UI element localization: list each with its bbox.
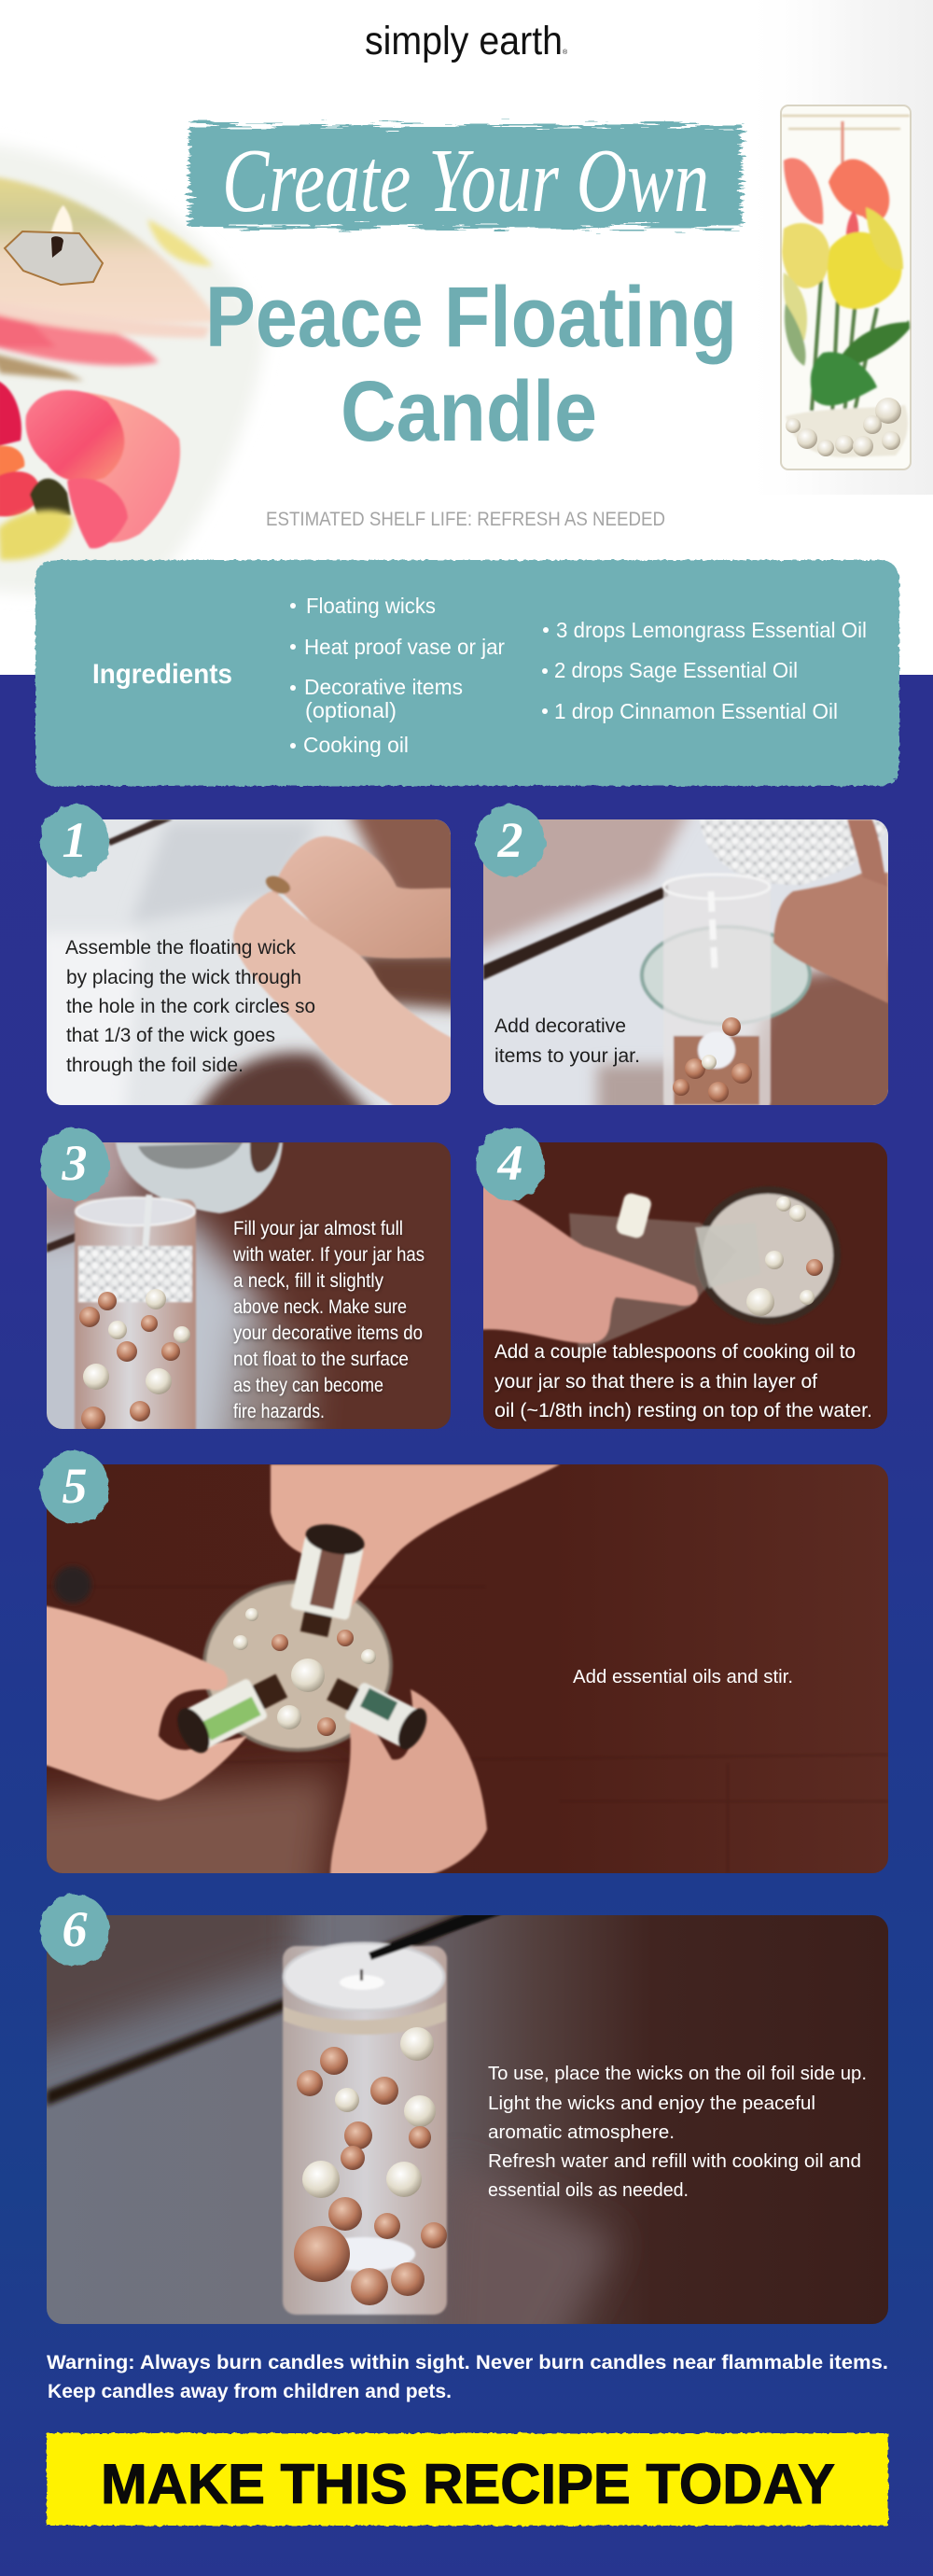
badge: number 4: 4	[496, 1135, 522, 1191]
panel: step 6	[47, 1915, 888, 2324]
step 3 text: fire hazards.	[233, 1401, 325, 1422]
step 3 text: your decorative items do	[233, 1323, 423, 1344]
step 6 text	[488, 2064, 867, 2201]
panel: step 1	[47, 819, 451, 1105]
panel: step 3	[47, 1142, 451, 1429]
badge: number 3	[40, 1127, 109, 1200]
step 1 text: Assemble the floating wick	[65, 937, 296, 959]
step 4 text: oil (~1/8th inch) resting on top of the water.	[494, 1400, 872, 1421]
step 1 text: that 1/3 of the wick goes	[66, 1025, 275, 1046]
list: essential oils: 2 drops Sage Essential Oil	[554, 658, 798, 682]
list: essential oils: 3 drops Lemongrass Essential Oil	[556, 618, 867, 642]
step 2 text: items to your jar.	[494, 1045, 640, 1067]
badge: number 5: 5	[62, 1458, 88, 1514]
step 3 text: not float to the surface	[233, 1349, 409, 1370]
pink and red flowers	[0, 381, 180, 560]
bowl body	[0, 140, 266, 595]
step 1 text: the hole in the cork circles so	[66, 996, 315, 1017]
step 2 text: Add decorative	[494, 1015, 626, 1037]
title: Peace Floating Candle: Peace Floating	[205, 270, 737, 365]
list: supplies: Decorative items	[304, 675, 463, 699]
logo: simply earth: ®	[563, 49, 568, 56]
right hand	[330, 1689, 487, 1876]
navy background	[0, 675, 933, 2576]
flowers under rim	[0, 301, 210, 381]
title: Peace Floating Candle	[205, 270, 737, 459]
list: supplies: (optional)	[305, 698, 397, 722]
white header background	[0, 0, 933, 675]
list: essential oils: 1 drop Cinnamon Essential Oil	[554, 699, 838, 723]
list: supplies	[290, 594, 505, 757]
step 6 text: Refresh water and refill with cooking oil and	[488, 2151, 861, 2172]
step 3 text: Fill your jar almost full	[233, 1218, 403, 1239]
title: Peace Floating Candle: Candle	[341, 364, 597, 459]
badge: number 1: 1	[62, 812, 88, 868]
badge: number 3: 3	[62, 1135, 88, 1191]
badge: number 2: 2	[496, 812, 522, 868]
step 4 text	[494, 1341, 872, 1421]
badge: number 4	[476, 1127, 545, 1200]
step 3 text: as they can become	[233, 1375, 383, 1396]
list: supplies: Floating wicks	[306, 594, 436, 618]
essential oil bottles	[171, 1519, 433, 1758]
panel: ingredients	[35, 560, 899, 786]
list: essential oils	[542, 618, 867, 723]
panel: step 4	[476, 1142, 887, 1429]
panel: step 2	[483, 819, 888, 1105]
step 1 text: by placing the wick through	[66, 967, 301, 988]
warning text: Keep candles away from children and pets.	[48, 2381, 452, 2402]
step 4 text: Add a couple tablespoons of cooking oil to	[494, 1341, 856, 1363]
warning text	[47, 2352, 888, 2402]
badge: number 5	[40, 1450, 109, 1523]
oil surface	[0, 175, 219, 324]
photo: floating candle in bowl	[0, 140, 266, 595]
badge: number 6: 6	[62, 1901, 88, 1957]
warning text: Warning: Always burn candles within sight. Never burn candles near flammable items.	[47, 2352, 888, 2373]
list: supplies: Cooking oil	[303, 733, 409, 757]
panel: step 5	[47, 1464, 888, 1873]
step 3 text: with water. If your jar has	[232, 1244, 425, 1266]
step 6 text: essential oils as needed.	[488, 2180, 689, 2201]
banner: Create Your Own: Create Your Own	[222, 131, 709, 231]
badge: number 6	[40, 1894, 109, 1967]
step 1 text: through the foil side.	[66, 1055, 244, 1076]
call to action: make this recipe today: MAKE THIS RECIPE TODAY	[101, 2453, 835, 2515]
badge: number 1	[40, 805, 109, 877]
top hand	[271, 1464, 560, 1617]
step 2 text	[494, 1015, 640, 1067]
step 3 text: a neck, fill it slightly	[233, 1270, 383, 1292]
step 4 text: your jar so that there is a thin layer of	[494, 1371, 817, 1393]
step 6 text: To use, place the wicks on the oil foil side up.	[488, 2064, 867, 2084]
logo: simply earth: simply earth	[365, 19, 563, 63]
list: supplies: Heat proof vase or jar	[304, 635, 505, 659]
flame	[50, 205, 73, 241]
shelf life note: ESTIMATED SHELF LIFE: REFRESH AS NEEDED	[266, 509, 665, 530]
step 1 text	[65, 937, 315, 1076]
ingredients heading: Ingredients	[92, 659, 232, 690]
brush stroke	[189, 125, 742, 228]
call to action: make this recipe today	[47, 2433, 888, 2526]
left hand	[42, 1605, 247, 1800]
badge: number 2	[476, 805, 545, 877]
step 5 text: Add essential oils and stir.	[573, 1667, 793, 1687]
cork wick float	[5, 231, 103, 285]
step 6 text: aromatic atmosphere.	[488, 2122, 675, 2143]
step 6 text: Light the wicks and enjoy the peaceful	[488, 2093, 815, 2114]
step 3 text: above neck. Make sure	[233, 1296, 407, 1318]
photo: jar with flowers	[737, 0, 933, 495]
step 3 text	[232, 1218, 425, 1422]
